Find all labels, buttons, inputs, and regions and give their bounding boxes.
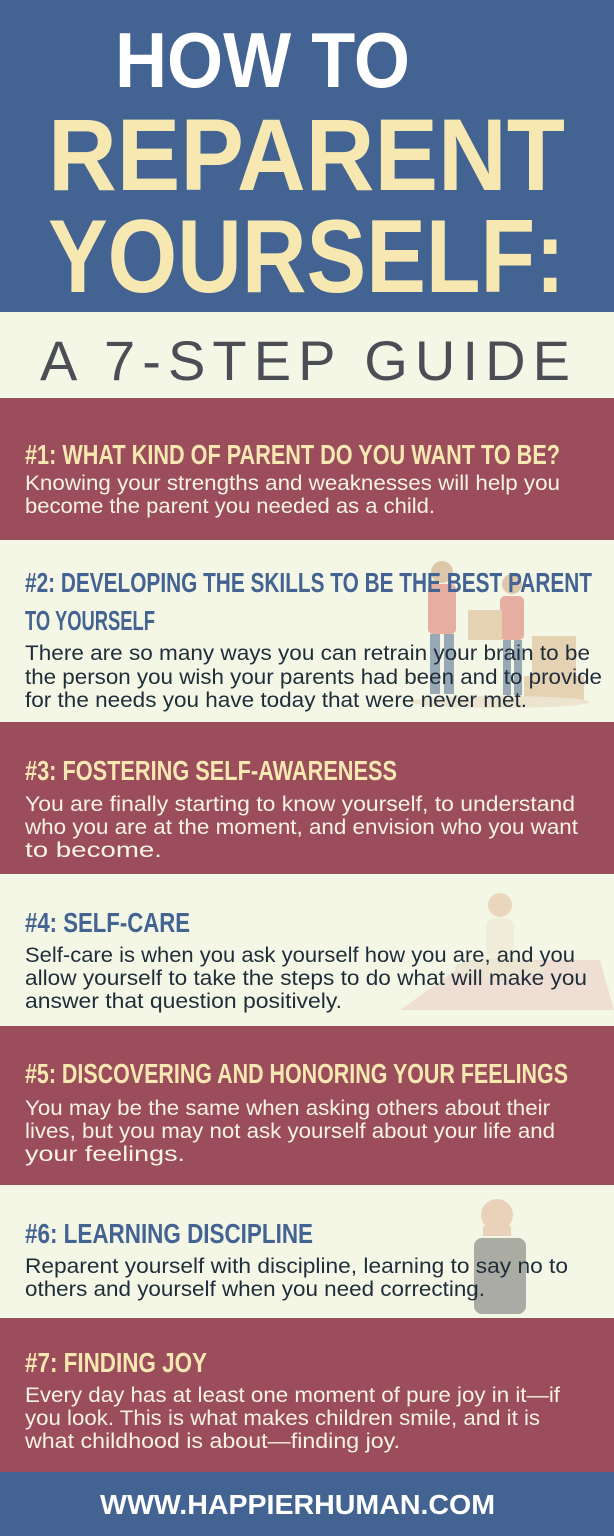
panel: step 6: others and yourself when you need correcting. xyxy=(25,1278,485,1301)
panel: step 7: what childhood is about—finding joy. xyxy=(24,1430,400,1453)
panel: step 6: #6: LEARNING DISCIPLINE xyxy=(25,1218,313,1249)
panel: step 5: your feelings. xyxy=(25,1143,185,1166)
panel: step 3: You are finally starting to know yourself, to understand xyxy=(25,793,575,816)
panel: step 7: Every day has at least one moment of pure joy in it—if xyxy=(25,1384,560,1407)
panel: step 6: Reparent yourself with discipline, learning to say no to xyxy=(25,1255,568,1278)
panel: step 3: to become. xyxy=(25,839,162,862)
title: REPARENT: REPARENT xyxy=(48,98,565,212)
panel: step 6 xyxy=(0,1185,614,1318)
panel: step 4 xyxy=(0,874,614,1026)
panel: step 2 xyxy=(0,540,614,722)
panel: step 4: answer that question positively. xyxy=(25,990,342,1013)
illustration: man saying no xyxy=(474,1199,526,1314)
illustration: people with boxes xyxy=(410,561,590,708)
footer xyxy=(0,1472,614,1536)
panel: step 4: allow yourself to take the steps to do what will make you xyxy=(25,967,587,990)
subtitle band xyxy=(0,312,614,398)
panel: step 7: #7: FINDING JOY xyxy=(25,1347,207,1378)
panel: step 7 xyxy=(0,1318,614,1472)
illustration: meditating woman xyxy=(400,893,614,1010)
footer: WWW.HAPPIERHUMAN.COM xyxy=(100,1489,495,1520)
panel: step 3: #3: FOSTERING SELF-AWARENESS xyxy=(25,755,397,786)
panel: step 4: Self-care is when you ask yourself how you are, and you xyxy=(25,944,575,967)
panel: step 2: TO YOURSELF xyxy=(25,605,155,636)
panel: step 2: for the needs you have today that were never met. xyxy=(25,689,527,712)
panel: step 2: There are so many ways you can retrain your brain to be xyxy=(25,642,590,665)
subtitle band: A 7-STEP GUIDE xyxy=(40,329,570,392)
title: HOW TO: HOW TO xyxy=(115,16,410,104)
panel: step 5: You may be the same when asking others about their xyxy=(25,1097,550,1120)
panel: step 2: the person you wish your parents had been and to provide xyxy=(25,666,602,689)
panel: step 7: you look. This is what makes children smile, and it is xyxy=(25,1407,540,1430)
panel: step 4: #4: SELF-CARE xyxy=(25,907,190,938)
panel: step 5: lives, but you may not ask yourself about your life and xyxy=(25,1120,555,1143)
panel: step 1: become the parent you needed as a child. xyxy=(25,495,435,518)
panel: step 3: who you are at the moment, and envision who you want xyxy=(24,816,578,839)
panel: step 3 xyxy=(0,722,614,874)
header band xyxy=(0,0,614,312)
panel: step 1: Knowing your strengths and weaknesses will help you xyxy=(25,472,560,495)
panel: step 5 xyxy=(0,1026,614,1185)
panel: step 1 xyxy=(0,398,614,540)
